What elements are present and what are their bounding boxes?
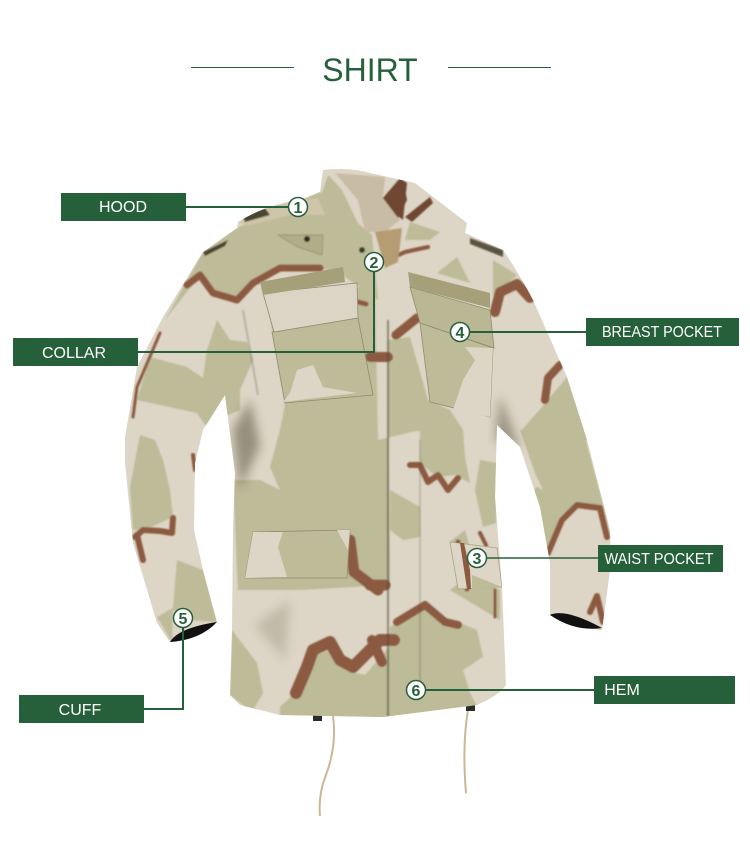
callout: breast pocket: BREAST POCKET xyxy=(602,324,722,341)
callout: hem xyxy=(406,676,735,704)
icon: cuff openings xyxy=(170,622,217,642)
callout: hem: 6 xyxy=(412,683,421,700)
callout: hood: 1 xyxy=(294,200,303,217)
inner collar lining xyxy=(335,173,400,232)
left waist pocket xyxy=(245,530,350,578)
right waist pocket xyxy=(450,542,502,589)
dark collar camo xyxy=(383,178,433,222)
callout: collar: COLLAR xyxy=(42,345,106,362)
shading seams xyxy=(243,310,420,716)
title: SHIRT xyxy=(322,52,418,88)
right chest pocket xyxy=(408,272,494,417)
callout: collar xyxy=(13,252,384,366)
icon: drawstrings xyxy=(313,705,475,816)
callout: breast pocket xyxy=(450,318,739,346)
hood fold xyxy=(238,198,325,225)
callout: waist pocket: 3 xyxy=(473,551,482,568)
callout: waist pocket xyxy=(468,545,723,572)
callout: hood xyxy=(61,193,308,221)
brown camo bands xyxy=(133,247,607,693)
callout: collar: 2 xyxy=(370,255,379,272)
callout: breast pocket: 4 xyxy=(456,325,465,342)
callout: cuff: CUFF xyxy=(59,702,102,719)
left chest pocket xyxy=(260,267,373,403)
icon: camouflage jacket body xyxy=(125,169,610,717)
callout: hem: HEM xyxy=(604,682,640,699)
olive camo areas xyxy=(130,175,610,720)
jacket photo illustration xyxy=(110,160,630,816)
callout: hood: HOOD xyxy=(99,199,147,216)
callout: waist pocket: WAIST POCKET xyxy=(604,551,714,568)
callout: cuff: 5 xyxy=(179,611,188,628)
callout: cuff xyxy=(19,608,192,723)
